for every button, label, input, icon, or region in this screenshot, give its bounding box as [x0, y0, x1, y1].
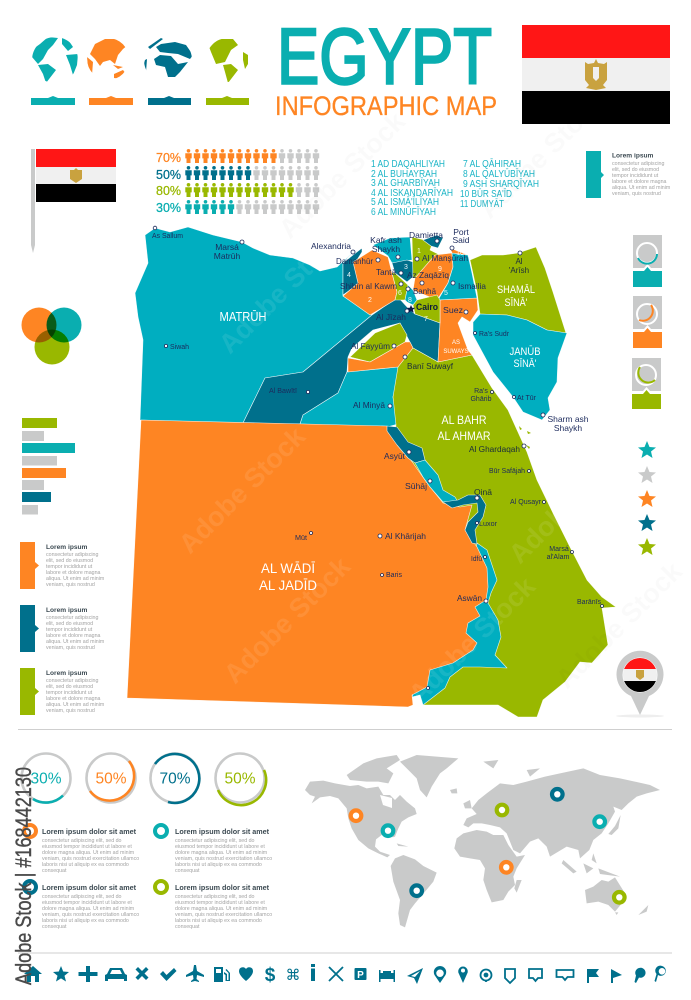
numbered governorate list: 7 AL QĀHIRAH — [463, 158, 521, 170]
row 80%: 80% — [156, 184, 181, 198]
governorate numbers: 8 — [408, 297, 412, 304]
text callout: green: tempor incididunt ut — [46, 690, 93, 696]
lorem block: green: Lorem ipsum dolor sit amet — [175, 883, 270, 892]
lorem block: teal: consectetur adipiscing elit, sed do — [175, 838, 255, 844]
region name labels: MATRŪH — [220, 309, 266, 324]
side ring widgets — [632, 235, 662, 409]
map labels: Luxor — [479, 521, 498, 528]
region: Suhaj — [415, 460, 458, 502]
lorem block: teal: veniam, quis nostrud exercitation ullamco — [175, 856, 272, 862]
map labels: Idfū — [471, 556, 482, 563]
icon: check — [160, 968, 176, 981]
region: Al Qahirah 7 — [413, 295, 440, 323]
lorem block: dark blue: eiusmod tempor incididunt ut labore et — [42, 900, 132, 906]
numbered governorate list: 10 BŪR SA'ĪD — [460, 188, 512, 200]
region: Matruh — [135, 227, 372, 423]
icon: small pin — [458, 967, 468, 983]
map labels: Al Ghardaqah — [469, 445, 520, 454]
map labels: Damanhūr — [336, 256, 373, 266]
globe: teal — [32, 37, 78, 83]
governorate numbers: 10 — [456, 250, 464, 257]
ring 50%: 50% — [95, 770, 127, 788]
map labels: 'Arīsh — [509, 266, 529, 275]
red sea islands — [519, 426, 531, 449]
map labels: Ghārib — [470, 396, 492, 403]
text callout: dark blue: elit, sed do eiusmod — [46, 621, 93, 627]
lorem block: dark blue: laboris nisi ut aliquip ex ea commodo — [42, 918, 129, 924]
icon: magnifier — [654, 966, 666, 982]
region name labels: SĪNĀ' — [504, 297, 528, 309]
text callout: top right: elit, sed do eiusmod — [612, 167, 659, 173]
lorem block: dark blue: veniam, quis nostrud exercitation ullamco — [42, 912, 139, 918]
watermark text overlay — [173, 86, 689, 709]
text callout: orange: aliqua. Ut enim ad minim — [46, 576, 105, 582]
lorem block: teal: eiusmod tempor incididunt ut labore et — [175, 844, 265, 850]
row 30% — [156, 200, 319, 215]
map labels: Shaykh — [554, 423, 582, 433]
lorem block: dark blue: Lorem ipsum dolor sit amet — [42, 883, 137, 892]
text callout: orange: labore et dolore magna — [46, 570, 101, 576]
region: Al Minufiyah 6 — [392, 273, 408, 300]
text callout: orange: elit, sed do eiusmod — [46, 558, 93, 564]
globe: dark blue — [143, 38, 193, 77]
text callout: green: elit, sed do eiusmod — [46, 684, 93, 690]
watermark text overlay: Adobe Stock — [503, 431, 642, 569]
map of Egypt — [127, 226, 616, 717]
numbered governorate list — [371, 158, 539, 218]
icon: command: ⌘ — [286, 966, 300, 984]
ring 50% — [86, 754, 136, 802]
icon: pushpin — [634, 968, 646, 983]
icon strip — [24, 964, 666, 986]
numbered governorate list: 2 AL BUHAYRAH — [371, 169, 437, 180]
icon: target pin — [480, 970, 492, 982]
region: Suez — [438, 298, 478, 362]
icon: navigation arrow — [407, 968, 423, 984]
region: Al Qalyubiyah 8 — [405, 285, 417, 305]
world landmasses — [305, 755, 660, 927]
pictogram percentages — [156, 149, 319, 215]
region: Al Gharbiyah 3 — [392, 260, 413, 282]
icon: parking — [354, 968, 366, 981]
text callout: green: veniam, quis nostrud — [46, 708, 95, 714]
lorem block: dark blue: consequat — [42, 924, 67, 930]
stock id vertical caption: Adobe Stock | #168442130 — [11, 767, 36, 985]
text callout: dark blue: consectetur adipiscing — [46, 615, 98, 621]
ring 30% — [22, 754, 70, 803]
map labels: Al — [515, 257, 523, 266]
ring 50% green — [216, 754, 266, 805]
lorem block: green — [155, 881, 272, 930]
numbered governorate list: 6 AL MINŪFĪYAH — [371, 206, 436, 218]
map labels: As Sallum — [152, 233, 183, 240]
map labels: Al Fayyūm — [351, 341, 390, 351]
map labels: Al Manşūrah — [422, 253, 468, 263]
governorate numbers: 6 — [398, 290, 402, 297]
map labels: AS — [452, 340, 460, 346]
lorem block: orange — [24, 825, 139, 874]
map labels: Ismailia — [458, 281, 486, 291]
icon: triangle flag — [611, 969, 622, 983]
world map — [305, 755, 660, 927]
region: Al Fayyum — [350, 323, 407, 362]
lorem block: dark blue: consectetur adipiscing elit, sed do — [42, 894, 122, 900]
watermark text overlay: Adobe Stock — [403, 571, 542, 709]
icon: bed — [379, 970, 395, 982]
text callout: top right: Lorem ipsum — [612, 152, 654, 160]
map labels: Baris — [386, 572, 402, 579]
region: Dumyat — [423, 235, 443, 248]
icon: cross — [136, 967, 148, 980]
lorem block: teal: dolore magna aliqua. Ut enim ad minim — [175, 850, 268, 856]
map labels: Siwah — [170, 344, 189, 351]
lorem block: orange: dolore magna aliqua. Ut enim ad minim — [42, 850, 135, 856]
region: Bur Said — [450, 248, 468, 255]
text callout: dark blue: tempor incididunt ut — [46, 627, 93, 633]
lorem block: orange: consequat — [42, 868, 67, 874]
lorem block: orange: veniam, quis nostrud exercitation ullamco — [42, 856, 139, 862]
icon: info — [311, 964, 315, 981]
icon: plane — [186, 965, 204, 982]
divider lines — [18, 729, 672, 954]
lorem block: green: veniam, quis nostrud exercitation ullamco — [175, 912, 272, 918]
region: Janub Sina — [473, 314, 567, 420]
map labels: Al Khārijah — [385, 531, 426, 541]
icon: plus — [78, 966, 98, 982]
map labels: Tantā — [376, 267, 396, 277]
ring 50% green: 50% — [224, 770, 256, 788]
text callout: orange — [20, 542, 105, 589]
map labels: Banhā — [413, 286, 436, 296]
region name labels: SHAMĀL — [497, 284, 535, 296]
map labels: Kafr ash — [370, 235, 402, 245]
icon: dollar: $ — [265, 965, 276, 986]
text callout: top right — [586, 151, 671, 198]
region: Shamal Sina — [470, 247, 566, 333]
lorem block: orange: Lorem ipsum dolor sit amet — [42, 827, 137, 836]
icon: banner flag — [587, 969, 599, 983]
row 70% — [156, 149, 319, 165]
text callout: top right: tempor incididunt ut — [612, 173, 659, 179]
text callout: dark blue: Lorem ipsum — [46, 607, 88, 614]
map labels: At Tūr — [517, 395, 537, 402]
text callout: orange: consectetur adipiscing — [46, 552, 98, 558]
map labels: Said — [452, 235, 470, 245]
icon: wide bubble — [556, 970, 574, 980]
title: EGYPT — [277, 12, 492, 100]
numbered governorate list: 1 AD DAQAHLIYAH — [371, 159, 445, 170]
lorem block: teal — [155, 825, 272, 874]
ring widget: teal — [633, 235, 662, 287]
lorem block: green: consectetur adipiscing elit, sed do — [175, 894, 255, 900]
region: Kafr ash Shaykh — [373, 237, 412, 263]
map labels: Shaykh — [372, 244, 400, 254]
governorate numbers: 7 — [424, 316, 428, 323]
map labels: Marsá — [215, 242, 239, 252]
text callout: dark blue: labore et dolore magna — [46, 633, 101, 639]
lorem block: green: consequat — [175, 924, 200, 930]
numbered governorate list: 4 AL ISKANDARĪYAH — [371, 187, 453, 199]
map labels: Port — [453, 227, 469, 237]
text callout: dark blue: veniam, quis nostrud — [46, 645, 95, 651]
text callout: top right: veniam, quis nostrud — [612, 191, 661, 197]
map labels — [152, 227, 601, 606]
governorate numbers: 4 — [347, 272, 351, 279]
region name labels: AL WĀDĪ — [261, 560, 315, 576]
map labels: Al Minyā — [353, 400, 385, 410]
region: Al Minya — [300, 367, 398, 427]
globe label bars — [31, 96, 249, 105]
region: Qina — [443, 495, 486, 544]
governorate numbers: 1 — [417, 248, 421, 255]
map labels: Al Bawītī — [269, 388, 297, 395]
map labels: Al Qusayr — [510, 499, 542, 506]
globe: orange — [87, 39, 129, 79]
region: Al Ismailiyah 5 — [438, 253, 477, 300]
lorem block: green: dolore magna aliqua. Ut enim ad minim — [175, 906, 268, 912]
map regions — [127, 227, 616, 717]
bar chart — [22, 418, 75, 514]
governorate numbers — [347, 248, 464, 323]
icon: star — [53, 966, 69, 982]
map labels: Ra's Sudr — [479, 331, 510, 338]
region name labels: SĪNĀ' — [514, 358, 536, 370]
text callout: green: Lorem ipsum — [46, 670, 88, 677]
map labels: SUWAYS — [443, 349, 469, 355]
icon: pin outline — [434, 966, 446, 983]
icon: restaurant — [329, 967, 343, 981]
numbered governorate list: 9 ASH SHARQĪYAH — [463, 178, 539, 190]
globe: green — [208, 39, 248, 83]
numbered governorate list: 5 AL ISMĀ'ĪLĪYAH — [371, 196, 439, 208]
region name labels: AL JADĪD — [259, 577, 317, 593]
map labels: Sharm ash — [547, 414, 589, 424]
text callout: top right: consectetur adipiscing — [612, 161, 664, 167]
region: Ash Sharqiyah 9 — [413, 253, 453, 300]
numbered governorate list: 8 AL QALYŪBĪYAH — [463, 168, 535, 180]
text callout: orange: tempor incididunt ut — [46, 564, 93, 570]
row 50%: 50% — [156, 168, 181, 182]
text callout: orange: Lorem ipsum — [46, 544, 88, 551]
region: Ad Daqahliyah 1 — [412, 237, 440, 278]
governorate numbers: 5 — [444, 290, 448, 297]
text callout: orange: veniam, quis nostrud — [46, 582, 95, 588]
map labels: Banī Suwayf — [407, 362, 454, 371]
lorem block: teal: consequat — [175, 868, 200, 874]
map labels: Marsá — [549, 546, 569, 553]
text callout: top right: labore et dolore magna — [612, 179, 667, 185]
icon: square marker — [505, 969, 515, 983]
map labels: Barānīs — [577, 599, 601, 606]
text callout: dark blue — [20, 605, 105, 652]
region: Al Buhayrah 2 — [343, 250, 397, 315]
map pin with flag — [616, 651, 664, 718]
watermark text overlay: Adobe Stock — [218, 551, 357, 689]
icon: parking: P — [357, 970, 364, 981]
lorem block: orange: consectetur adipiscing elit, sed do — [42, 838, 122, 844]
star icons — [638, 441, 656, 555]
map labels: Al Jīzah — [376, 312, 406, 322]
row 80% — [156, 183, 319, 198]
lorem block: teal: laboris nisi ut aliquip ex ea commodo — [175, 862, 262, 868]
location markers — [351, 789, 625, 903]
icon: speech bubble — [529, 969, 542, 981]
text callout: green: labore et dolore magna — [46, 696, 101, 702]
map labels: Būr Safājah — [489, 468, 525, 475]
map labels: Cairo — [416, 302, 438, 313]
lorem block: teal: Lorem ipsum dolor sit amet — [175, 827, 270, 836]
venn diagram — [22, 308, 82, 364]
region: Bani Suwayf — [348, 342, 413, 372]
text callout: green: aliqua. Ut enim ad minim — [46, 702, 105, 708]
row 30%: 30% — [156, 201, 181, 215]
ring 70%: 70% — [159, 770, 191, 788]
lorem block: orange: laboris nisi ut aliquip ex ea commodo — [42, 862, 129, 868]
globe icons row — [31, 37, 249, 105]
map labels: Aswān — [457, 593, 482, 603]
lorem block: dark blue: dolore magna aliqua. Ut enim ad minim — [42, 906, 135, 912]
region: Al Iskandariyah 4 — [343, 248, 362, 295]
numbered governorate list: 3 AL GHARBĪYAH — [371, 177, 440, 189]
numbered governorate list: 11 DUMYĀT — [460, 198, 504, 210]
region: Asyut — [387, 426, 425, 463]
map labels: Alexandria — [311, 241, 351, 251]
text callout: green — [20, 668, 105, 715]
map labels: Ra's — [474, 388, 488, 395]
text callout: top right: aliqua. Ut enim ad minim — [612, 185, 671, 191]
region name labels: AL BAHR — [442, 413, 487, 427]
ring 30%: 30% — [30, 770, 62, 788]
lorem block: green: laboris nisi ut aliquip ex ea commodo — [175, 918, 262, 924]
map labels: Asyūt — [384, 451, 406, 461]
map labels: Sūhāj — [405, 481, 427, 491]
lorem block: orange: eiusmod tempor incididunt ut labore et — [42, 844, 132, 850]
governorate numbers: 9 — [438, 266, 442, 273]
map labels: Az Zaqāzīq — [407, 270, 449, 280]
governorate numbers: 2 — [368, 297, 372, 304]
percent ring charts — [22, 754, 266, 805]
map labels: Suez — [443, 305, 463, 315]
map labels: Qinā — [474, 488, 493, 497]
title: INFOGRAPHIC MAP — [275, 91, 497, 121]
governorate numbers: 3 — [404, 264, 408, 271]
watermark text overlay: Adobe Stock — [213, 221, 352, 359]
region: Al Bahr al Ahmar — [380, 348, 616, 717]
city markers — [153, 226, 603, 689]
icon: home — [24, 966, 42, 982]
text callout: green: consectetur adipiscing — [46, 678, 98, 684]
map labels: Matrūh — [214, 251, 240, 261]
hudson bay — [380, 795, 392, 808]
region name labels: AL AHMAR — [438, 429, 491, 443]
region name labels: JANŪB — [510, 346, 540, 358]
ring widget: orange — [633, 296, 662, 348]
map labels: al'Alam — [547, 554, 570, 561]
ring 70% — [150, 754, 200, 803]
watermark text overlay: Adobe Stock — [173, 421, 312, 559]
region: Aswan and lake — [412, 543, 507, 705]
region name labels — [220, 284, 540, 593]
icon: fuel — [214, 967, 230, 982]
title — [275, 12, 497, 121]
row 50% — [156, 166, 319, 182]
text callout: dark blue: aliqua. Ut enim ad minim — [46, 639, 105, 645]
map labels: Mūt — [295, 535, 307, 542]
large flag of Egypt — [522, 25, 670, 124]
icon: heart — [239, 967, 253, 981]
lorem block: dark blue — [24, 881, 139, 930]
lorem block: green: eiusmod tempor incididunt ut labore et — [175, 900, 265, 906]
region: Al Wadi al Jadid — [127, 420, 488, 707]
map labels: Shibīn al Kawm — [340, 281, 397, 291]
small flag on pole — [31, 149, 116, 253]
ring widget: green — [632, 358, 661, 409]
row 70%: 70% — [156, 151, 181, 165]
region: Al Jizah — [243, 297, 440, 424]
map labels: Damietta — [409, 230, 443, 240]
icon: car — [105, 968, 127, 981]
